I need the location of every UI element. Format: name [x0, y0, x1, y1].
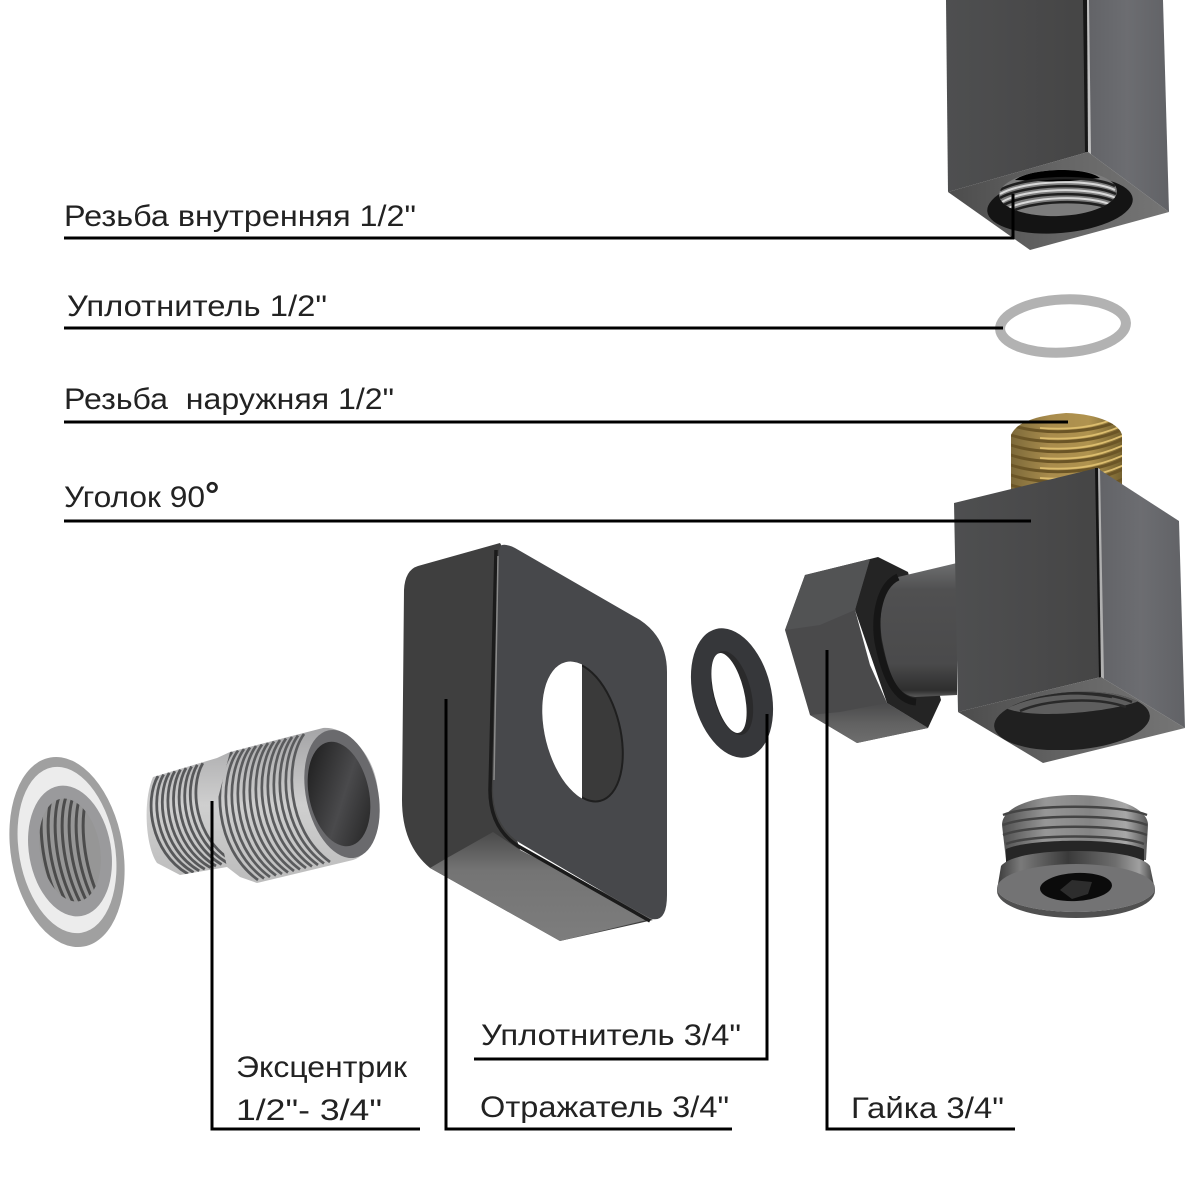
leader: external thread — [64, 420, 1068, 424]
90 degree square elbow — [954, 468, 1185, 763]
label: eccentric: Эксцентрик — [236, 1051, 408, 1084]
threads on the small section — [151, 763, 233, 874]
label: seal 3/4: Уплотнитель 3/4" — [481, 1019, 741, 1052]
label: reflector: Отражатель 3/4" — [480, 1091, 729, 1124]
hex socket — [1039, 871, 1113, 903]
leader: reflector — [446, 699, 732, 1129]
label: external thread: Резьба наружняя 1/2" — [64, 383, 394, 416]
nut main face — [785, 559, 928, 743]
lock nut and connecting tube — [785, 557, 957, 743]
leader: seal 1/2 — [64, 326, 1003, 330]
tube — [881, 563, 957, 697]
plate lower side — [430, 832, 655, 941]
threads on the large section — [220, 734, 330, 880]
open end — [293, 723, 391, 865]
label: nut: Гайка 3/4" — [851, 1092, 1004, 1125]
blanking plug — [997, 795, 1155, 918]
gasket seat — [985, 171, 1135, 239]
sealing ring 1/2 — [999, 296, 1127, 356]
elbow bore — [990, 690, 1155, 750]
eccentric adapter — [147, 723, 391, 883]
dark collar — [877, 577, 916, 702]
inner thread of the pipe — [999, 170, 1117, 216]
nut lower facet — [810, 703, 928, 743]
reflector plate — [402, 543, 667, 941]
leader: eccentric — [212, 801, 420, 1129]
leader: elbow — [64, 520, 1031, 522]
nut chamfer — [855, 557, 941, 728]
label: eccentric size: 1/2"- 3/4" — [236, 1094, 382, 1127]
plate front face — [493, 545, 667, 919]
plate hole — [542, 662, 624, 802]
brass external thread — [1011, 413, 1122, 490]
top square pipe — [946, 0, 1169, 250]
nut upper facet — [785, 559, 870, 630]
label: internal thread: Резьба внутренняя 1/2" — [64, 200, 416, 233]
label: seal 1/2: Уплотнитель 1/2" — [67, 290, 327, 323]
label: elbow: Уголок 90 — [64, 481, 205, 514]
flange inner thread — [40, 798, 96, 902]
degree sign: ° — [205, 474, 219, 515]
leader: internal thread — [64, 194, 1013, 238]
wall flange — [9, 757, 125, 947]
rubber washer 3/4 — [678, 620, 786, 766]
leader: seal 3/4 — [474, 714, 767, 1059]
leader: nut — [827, 650, 1015, 1129]
